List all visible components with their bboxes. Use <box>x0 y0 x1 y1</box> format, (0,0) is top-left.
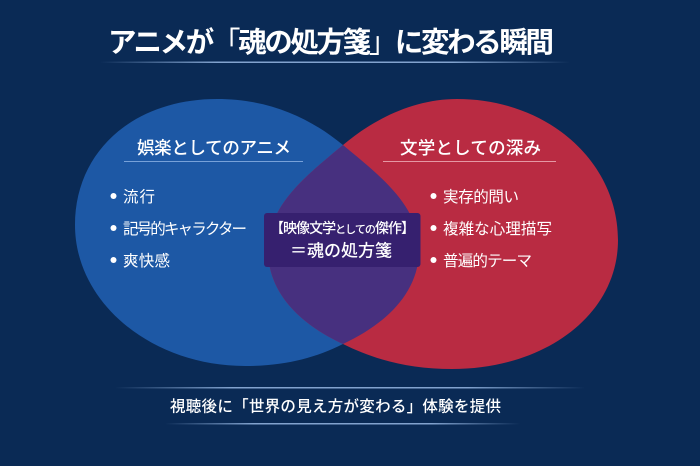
panel: entertainment anime <box>110 138 303 270</box>
heading: literary depth: 文学としての深み <box>400 138 541 158</box>
venn diagram <box>75 99 618 369</box>
list: entertainment traits: 記号的キャラクター <box>123 220 247 238</box>
list: literary traits: 複雑な心理描写 <box>443 220 552 238</box>
list: entertainment traits: 爽快感 <box>123 252 170 270</box>
list: literary traits <box>430 188 552 270</box>
callout: masterpiece: ＝魂の処方箋 <box>290 242 392 260</box>
list: literary traits: 実存的問い <box>443 188 519 206</box>
callout: masterpiece: 【映像文学としての傑作】 <box>270 220 415 236</box>
list: literary traits: 普遍的テーマ <box>443 252 532 270</box>
panel: literary depth <box>383 138 556 270</box>
heading: entertainment anime: 娯楽としてのアニメ <box>137 138 291 158</box>
callout: masterpiece <box>264 213 420 267</box>
list: entertainment traits <box>110 188 247 270</box>
circle: literary depth <box>268 99 618 369</box>
list: entertainment traits: 流行 <box>123 188 155 206</box>
overlap area <box>270 145 418 344</box>
footer message: 視聴後に「世界の見え方が変わる」体験を提供 <box>170 396 501 416</box>
title: アニメが「魂の処方箋」に変わる瞬間 <box>108 26 554 59</box>
circle: entertainment anime <box>75 99 419 366</box>
